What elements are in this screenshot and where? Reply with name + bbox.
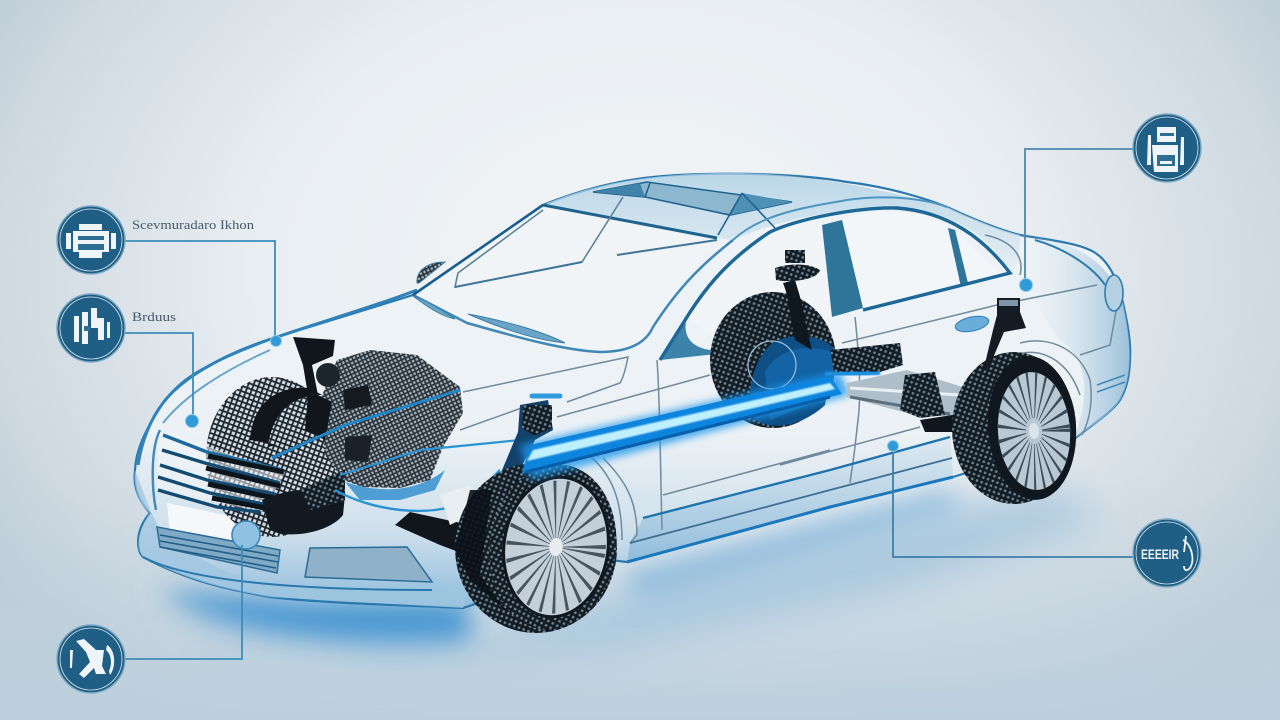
callout connectors	[125, 149, 1133, 659]
ground shadow	[150, 490, 1100, 665]
sunroof	[593, 182, 792, 235]
grille	[153, 430, 285, 512]
callout: top right	[1133, 114, 1201, 182]
icon: engine block	[66, 224, 116, 258]
side windows	[660, 197, 1010, 360]
icon: suspension	[70, 639, 114, 678]
engine	[262, 337, 520, 534]
front bumper	[135, 470, 470, 608]
label: top left: Scevmuradaro Ikhon	[132, 218, 255, 232]
sill panel	[627, 437, 953, 562]
side mirror	[417, 262, 445, 283]
rear tail light	[1105, 275, 1123, 311]
rear tint	[1020, 235, 1130, 440]
callout: bottom right	[1133, 519, 1201, 587]
connector nodes	[186, 278, 1032, 452]
callout: engine, top left	[57, 206, 125, 274]
glowing drive shaft	[520, 372, 850, 480]
front wheel	[455, 456, 627, 638]
exhaust pipe	[825, 343, 975, 432]
icon: hook	[1183, 536, 1192, 570]
icon: text mark: EEEEIR	[1141, 546, 1179, 562]
callout: transmission, middle left	[57, 294, 125, 362]
front suspension	[395, 396, 560, 560]
roof panel	[543, 173, 1020, 273]
rear suspension	[983, 298, 1026, 372]
sill lines	[627, 437, 953, 562]
windshield	[413, 197, 733, 352]
fog light	[232, 521, 260, 549]
icon: gearbox	[74, 308, 110, 344]
far rear wheel disc	[710, 250, 836, 428]
front disc	[206, 377, 338, 537]
callout: suspension, bottom left	[57, 625, 125, 693]
label: middle left: Brduus	[132, 309, 176, 324]
car body shell	[135, 174, 1130, 608]
car	[125, 149, 1133, 659]
door handle	[954, 314, 990, 334]
rear wheel	[952, 352, 1081, 504]
body lines	[460, 235, 1125, 543]
hood rim lines	[138, 290, 417, 465]
icon: battery unit	[1147, 127, 1184, 172]
